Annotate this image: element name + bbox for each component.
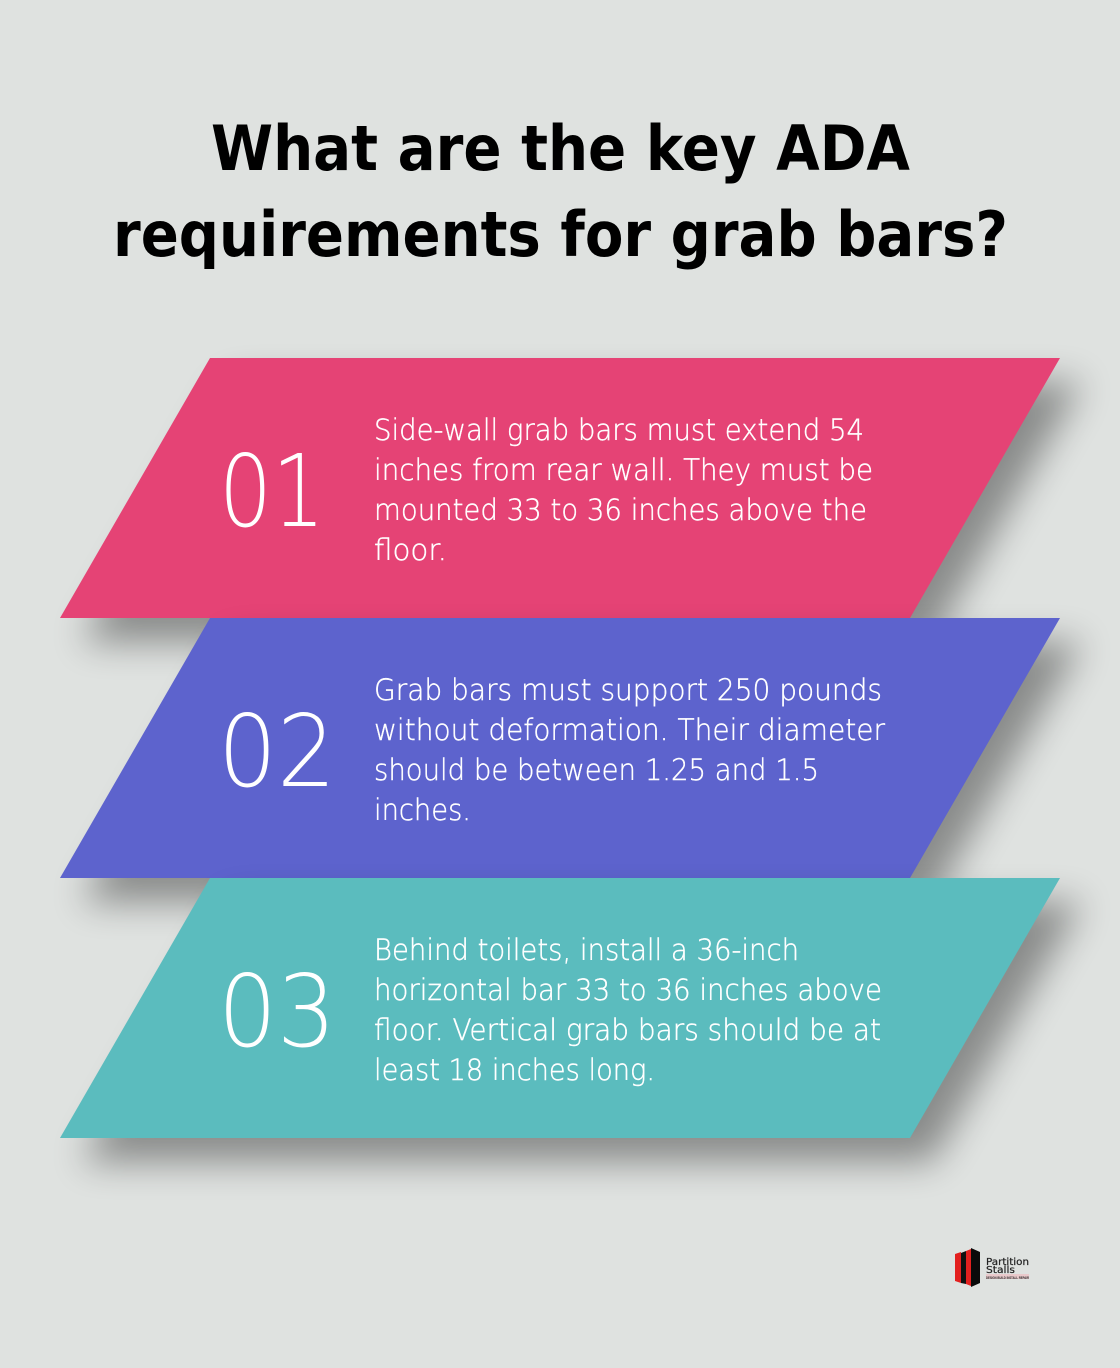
text: step 03 description: floor. Vertical grab bars should be at: [374, 1013, 881, 1047]
panel shape: pink parallelogram: [60, 358, 1060, 618]
panel: step 02: [60, 618, 1082, 902]
wordmark: DESIGN BUILD INSTALL REPAIR: [986, 1276, 1029, 1280]
panel shape: indigo parallelogram: [60, 618, 1060, 878]
text: step 03 description: Behind toilets, install a 36-inch: [374, 933, 799, 967]
text: step 03 description: [374, 933, 882, 1087]
wordmark: [986, 1257, 1029, 1280]
panel: step 03: [60, 878, 1082, 1162]
title: What are the key ADA: [211, 112, 910, 185]
wordmark: Stalls: [986, 1265, 1015, 1276]
text: step 02 description: should be between 1.25 and 1.5: [374, 753, 819, 787]
text: step 03 description: least 18 inches long.: [374, 1053, 655, 1087]
title: requirements for grab bars?: [113, 198, 1008, 271]
number 02: 02: [218, 693, 336, 810]
text: step 01 description: mounted 33 to 36 inches above the: [374, 493, 867, 527]
text: step 03 description: horizontal bar 33 to 36 inches above: [374, 973, 882, 1007]
text: step 02 description: [374, 673, 886, 827]
text: step 02 description: inches.: [374, 793, 471, 827]
number 03: 03: [218, 953, 336, 1070]
number 01: 01: [219, 433, 325, 550]
panel shape: teal parallelogram: [60, 878, 1060, 1138]
logo: Partition Stalls: [955, 1248, 1029, 1287]
text: step 02 description: Grab bars must support 250 pounds: [374, 673, 882, 707]
icon: partition bars: [955, 1248, 980, 1287]
text: step 01 description: [374, 413, 873, 567]
text: step 01 description: floor.: [374, 533, 447, 567]
text: step 01 description: Side-wall grab bars must extend 54: [374, 413, 864, 447]
wordmark: Partition: [986, 1257, 1029, 1268]
panel: step 01: [60, 358, 1082, 642]
text: step 01 description: inches from rear wall. They must be: [374, 453, 873, 487]
title: [113, 112, 1008, 271]
text: step 02 description: without deformation. Their diameter: [374, 713, 886, 747]
